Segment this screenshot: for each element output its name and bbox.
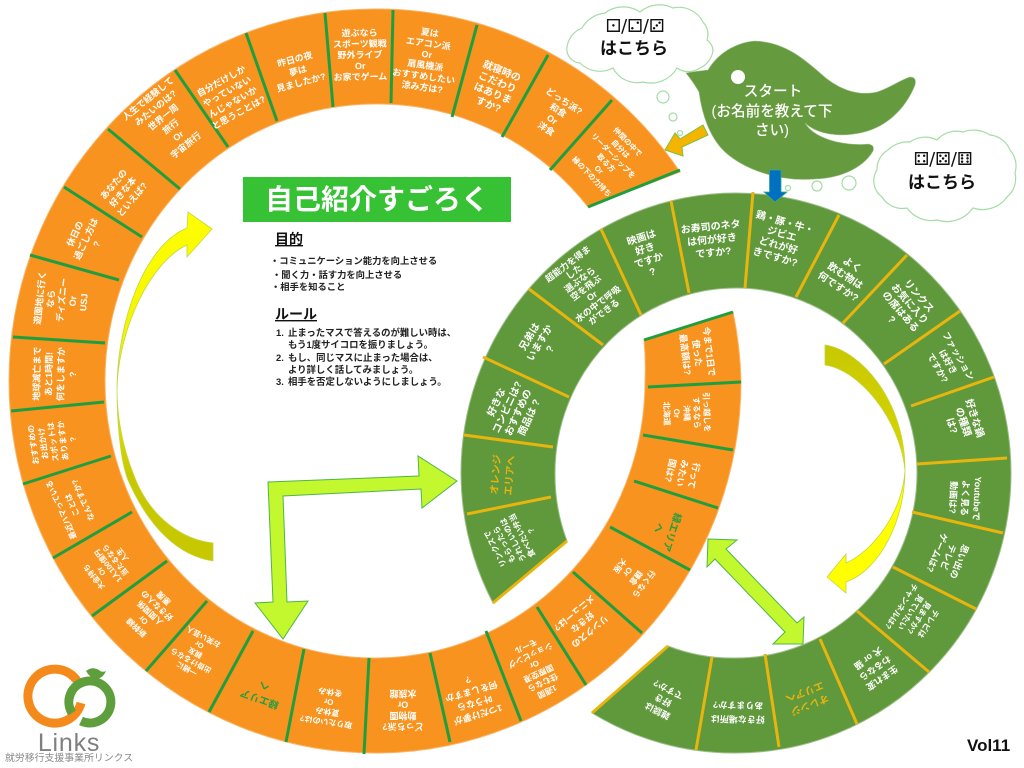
- cell: to orange area: オレンジ: [488, 454, 503, 495]
- text block: purpose list: [270, 255, 437, 292]
- cell: summer: エアコン派: [405, 36, 451, 52]
- cell: reborn: 生まれ変: [864, 663, 900, 693]
- cell: links menu: メニューは?: [552, 593, 597, 633]
- cell: kamakura or osaka: 鎌倉: [628, 569, 645, 588]
- cell: lottery: 人生: [113, 546, 130, 564]
- cell: favorite book: といえば?: [114, 180, 149, 219]
- cell: drink: 何ですか?: [816, 268, 861, 304]
- cell: highest spend: 最高額は?: [678, 333, 694, 376]
- cell: moving: するなら: [692, 397, 702, 429]
- cell: kamakura or osaka: 行くなら: [631, 569, 658, 600]
- cell: siblings: いますか: [524, 323, 555, 363]
- cell: dream: 昨日の夜: [276, 49, 314, 69]
- cell: hot pot: は?: [944, 416, 960, 435]
- cell: washoku or yoshoku: 和食: [548, 100, 569, 119]
- cell: bento: ?: [526, 527, 536, 535]
- cell: play: お家でゲーム: [333, 71, 387, 82]
- cell: drink: 飲む物は: [825, 259, 866, 292]
- cell: recent hobby: 最近ハマっている: [43, 479, 78, 541]
- cell: convenience store: 好きな: [484, 386, 508, 418]
- cell: experience: 世界一周: [145, 101, 180, 133]
- cell: summer: 夏は: [420, 27, 439, 39]
- cell: memory game: テレビ: [938, 543, 959, 572]
- cell: go out with: 親友: [185, 645, 204, 661]
- cell: movies: 映画は: [625, 227, 657, 248]
- orange ring band: [9, 9, 741, 753]
- cell: washoku or yoshoku: Or: [545, 113, 560, 127]
- cell: to orange area 2: オレンジ: [789, 692, 831, 718]
- cell: siblings: 兄弟は: [516, 320, 542, 353]
- cell: end of world: 何をしますか: [55, 347, 66, 401]
- start bird: スタート: [744, 83, 802, 100]
- cell: outing spot: ありますか: [56, 420, 70, 461]
- cell: to orange area 2: エリアへ: [784, 679, 825, 705]
- cell: to green area 2: 緑エリア: [660, 511, 685, 554]
- cell: bento: もらったら: [490, 525, 517, 565]
- cell: leadership: Or: [593, 163, 606, 176]
- cell: one wish: 1つだけ夢が: [453, 703, 504, 727]
- cell: to green area 2: へ: [652, 521, 665, 534]
- heading: purpose: 目的: [275, 231, 303, 247]
- cell: movies: ?: [648, 266, 657, 278]
- cell: country: みたい: [674, 459, 690, 487]
- cell: to green area: へ: [258, 679, 271, 692]
- cell: one wish: ?: [464, 674, 472, 685]
- cell: links seat: リンクス: [901, 277, 937, 315]
- cell: country: 国は?: [663, 458, 678, 483]
- cell: moving: 北海道: [662, 402, 673, 426]
- cell: lunch: 悪魔: [154, 590, 173, 608]
- cell: chat: 好き: [652, 691, 673, 709]
- cell: zoo or aquarium: Or: [397, 700, 408, 710]
- cell: one week stay: ショッピング: [507, 641, 554, 671]
- cell: drink: よく: [841, 254, 864, 275]
- cell: fashion: は好き: [937, 347, 960, 376]
- arrow: blue start arrow: [764, 170, 787, 202]
- text block: purpose list: ・相手を知ること: [271, 281, 345, 292]
- arrow: orange start arrow: [665, 125, 708, 156]
- cell: meat: どれが好: [758, 233, 800, 257]
- text block: rules list: 止まったマスで答えるのが難しい時は、: [288, 327, 456, 338]
- text block: rules list: 3.: [276, 376, 284, 387]
- cell: dream: 夢は: [288, 63, 308, 78]
- cell: tv: チャンネルは?: [883, 582, 921, 631]
- cell: memory game: 思い出の: [948, 543, 971, 580]
- cell: fashion: ファッション: [941, 330, 976, 382]
- logo: Links: Links: [38, 729, 100, 757]
- cell: kamakura or osaka: 大阪: [612, 557, 629, 576]
- cell: summer: 扇風機派: [407, 57, 444, 73]
- cell: summer: 涼み方は?: [401, 78, 444, 95]
- cell: holiday: ?: [91, 239, 103, 249]
- cell: outing spot: お出かけ: [35, 427, 50, 460]
- cell: superpower: Or: [585, 289, 600, 303]
- green ring band: [461, 193, 1011, 753]
- cell: recent hobby: ことは: [63, 492, 81, 518]
- text block: rules list: もし、同じマスに止まった場合は、: [288, 352, 438, 363]
- text block: rules list: [276, 327, 456, 387]
- bubbles: left of bird: [657, 91, 682, 136]
- cell: vacation: 冬休み: [317, 686, 343, 699]
- cloud: dice 1-3: はこちら: [600, 39, 668, 58]
- arrow: right curved yellow: [825, 345, 905, 593]
- cell: siblings: ?: [544, 344, 557, 355]
- cloud: dice 1-3: ⚀/⚁/⚂: [605, 16, 665, 37]
- cell: only me: と思うことは?: [210, 94, 267, 132]
- cell: end of world: あと1時間!: [43, 352, 54, 396]
- cell: theme park: USJ: [78, 293, 90, 312]
- title banner: [243, 177, 511, 222]
- cell: experience: 旅行: [160, 116, 181, 136]
- cell: only me: 自分だけしか: [195, 63, 247, 99]
- text block: purpose list: ・コミュニケーション能力を向上させる: [270, 255, 437, 266]
- text block: rules list: 1.: [276, 327, 284, 338]
- cell: lunch: 新幹線: [124, 616, 148, 640]
- cell: play: Or: [355, 61, 366, 71]
- cell: tv: 見ていたい: [896, 593, 926, 632]
- cell: vacation: Or: [323, 697, 334, 707]
- orange ring dividers: [11, 10, 741, 754]
- arrow: double-headed light green: [707, 539, 804, 644]
- cell: sushi: ですか?: [695, 245, 732, 260]
- cell: washoku or yoshoku: どっち派?: [544, 85, 585, 117]
- cell: reborn: わるなら: [857, 654, 893, 682]
- cell: dream: 見ましたか?: [275, 71, 327, 94]
- cell: zoo or aquarium: 水族館: [389, 688, 417, 700]
- cloud: dice 1-3: [567, 5, 713, 83]
- cell: sushi: お寿司のネタ: [680, 216, 741, 236]
- cell: bento: うれしいのは: [498, 517, 528, 563]
- cell: to orange area: エリアへ: [502, 455, 517, 496]
- cell: memory game: ゲームは?: [925, 532, 950, 574]
- cell: theme park: なら: [45, 289, 57, 308]
- cell: one week stay: 1週間: [536, 683, 559, 701]
- cell: youtube: 動画は?: [947, 481, 960, 514]
- cell: highest spend: 使った: [690, 339, 705, 367]
- cell: outing spot: スポットは: [46, 422, 60, 462]
- text block: purpose list: ・聞く力・話す力を向上させる: [272, 269, 402, 280]
- cell: chat: 雑談は: [643, 700, 672, 722]
- cell: go out with: お笑い芸人: [184, 624, 222, 651]
- cell: play: スポーツ観戦: [333, 38, 387, 49]
- cell: end of world: ?: [68, 371, 78, 377]
- cell: favorite book: あなたの: [98, 167, 129, 201]
- cell: favorite place: 好きな場所は: [711, 714, 765, 725]
- cell: highest spend: 今まで1日で: [701, 326, 718, 377]
- cloud: dice 4-6: はこちら: [908, 173, 976, 192]
- cell: links menu: リンクスの: [569, 613, 610, 649]
- start bird: (お名前を教えて下: [712, 103, 832, 120]
- cell: sleep: 就寝時の: [481, 57, 523, 84]
- text block: rules list: より詳しく話してみましょう。: [288, 364, 418, 375]
- cell: play: 遊ぶなら: [342, 27, 378, 38]
- cell: bento: リンクスで: [481, 529, 508, 569]
- arrow: left curved yellow: [117, 212, 213, 561]
- cell: lottery: 大金持ち: [80, 562, 107, 592]
- cell: tv: 見ますか?: [905, 600, 933, 636]
- cell: kamakura or osaka: Or: [622, 566, 634, 578]
- cell: convenience store: おすすめの: [502, 387, 534, 438]
- panel: green spiral track: [461, 192, 1011, 753]
- cell: superpower: 空を飛ぶ: [568, 272, 603, 303]
- cell: theme park: ディズニー: [54, 277, 69, 323]
- cell: favorite place: ありますか?: [713, 700, 763, 710]
- bubbles: right of bird: [786, 176, 856, 191]
- cell: hot pot: 好きな鍋: [963, 397, 988, 439]
- cell: only me: やっていない: [201, 74, 253, 109]
- cell: favorite book: 好きな本: [107, 174, 138, 209]
- cell: superpower: 水の中で呼吸: [573, 283, 623, 324]
- cell: one wish: 叶うなら: [456, 693, 493, 713]
- title banner: 自己紹介すごろく: [265, 183, 489, 215]
- cell: outing spot: おすすめの: [26, 424, 40, 465]
- cell: leadership: 仲間の中で: [612, 124, 645, 159]
- cell: fashion: ですか?: [925, 351, 950, 385]
- cell: washoku or yoshoku: 洋食: [536, 119, 557, 138]
- cell: sushi: は何が好き: [686, 230, 737, 248]
- cell: links seat: ?: [885, 314, 898, 326]
- cell: sleep: はありま: [472, 80, 514, 106]
- cell: superpower: 選ぶなら: [562, 264, 597, 295]
- cloud: dice 4-6: ⚃/⚄/⚅: [913, 149, 973, 170]
- cell: movies: 好き: [633, 239, 656, 258]
- cell: theme park: 遊園地に行く: [31, 270, 48, 325]
- heading: rules: ルール: [275, 306, 317, 322]
- cell: summer: Or: [421, 49, 433, 60]
- cell: end of world: 地球滅亡まで: [31, 347, 42, 401]
- cell: leadership: リーダーシップを: [590, 130, 638, 180]
- cloud: dice 4-6: [874, 130, 1016, 222]
- cell: theme park: Or: [67, 295, 79, 307]
- cell: lottery: 当たるなら: [99, 543, 130, 579]
- cell: holiday: 休日の: [64, 219, 85, 248]
- cell: leadership: 縁の下の力持ち: [571, 154, 614, 198]
- cell: one week stay: Or: [528, 659, 541, 671]
- cell: superpower: した: [564, 263, 584, 281]
- cell: go out with: Or: [193, 639, 205, 651]
- cell: lottery: 1人100億円: [92, 548, 124, 585]
- cell: tv: テレビは: [916, 608, 942, 640]
- cell: sleep: こだわり: [477, 69, 518, 95]
- cell: lottery: Or: [95, 565, 107, 578]
- cell: convenience store: コンビニは?: [489, 379, 524, 435]
- cell: moving: Or: [672, 409, 682, 418]
- cell: moving: 沖縄: [682, 405, 693, 421]
- cell: only me: んじゃないか: [207, 85, 259, 120]
- cell: meat: きですか?: [751, 245, 799, 269]
- cell: experience: Or: [171, 128, 186, 143]
- text block: rules list: 2.: [276, 352, 284, 363]
- cell: holiday: 過ごし方は: [71, 216, 100, 262]
- cell: superpower: 超能力を得ま: [543, 243, 593, 284]
- green ring dividers: [464, 192, 1007, 750]
- cell: leadership: 自分は: [610, 137, 633, 160]
- cell: bento: 食べたい弁当: [506, 512, 537, 559]
- cell: hot pot: の種類: [953, 405, 975, 438]
- cell: links menu: 好きな: [568, 609, 596, 635]
- cell: to green area: 緑エリア: [238, 687, 280, 712]
- cell: go out with: 出掛けるなら: [168, 646, 213, 676]
- cell: play: 野外ライブ: [337, 49, 383, 60]
- cell: lunch: Or: [137, 614, 150, 627]
- start bird: [686, 41, 915, 179]
- cell: outing spot: ?: [68, 436, 78, 442]
- cell: convenience store: 商品は ?: [514, 397, 543, 438]
- cell: moving: 引っ越しを: [702, 392, 713, 432]
- cell: one week stay: モール: [513, 637, 539, 656]
- cell: one week stay: 住むなら: [527, 672, 560, 694]
- logo: Links: 就労移行支援事業所リンクス: [5, 751, 133, 764]
- text block: rules list: 相手を否定しないようにしましょう。: [288, 376, 447, 387]
- cell: leadership: 取る方: [595, 151, 619, 174]
- cell: recent hobby: なんですか?: [70, 478, 96, 522]
- cell: experience: みたいのは?: [133, 88, 178, 128]
- cell: vacation: 夏休み: [315, 706, 340, 719]
- cell: experience: 人生で経験して: [120, 74, 176, 122]
- cell: superpower: ができる: [586, 296, 621, 327]
- cell: zoo or aquarium: どっち派?: [382, 722, 424, 732]
- cell: reborn: 犬 or 猫: [852, 645, 885, 672]
- cell: youtube: よく見る: [959, 480, 971, 516]
- cell: links seat: お気に入り: [889, 280, 932, 327]
- cell: experience: 宇宙旅行: [168, 129, 203, 161]
- cell: lunch: 人間関係: [135, 599, 165, 628]
- cell: vacation: 取りたいのは?: [299, 714, 353, 731]
- cell: movies: ですか: [633, 250, 665, 271]
- cell: one week stay: 国際空港: [522, 663, 556, 685]
- cell: go out with: 一緒に: [174, 660, 199, 679]
- cell: one wish: 何をしますか: [444, 679, 499, 704]
- cell: meat: ジビエ: [766, 223, 798, 244]
- cell: country: 行って: [686, 462, 703, 490]
- cell: chat: ですか?: [652, 677, 685, 701]
- start bird: さい): [755, 122, 789, 139]
- logo: Links: [5, 668, 133, 764]
- cell: links seat: の席はある: [880, 288, 923, 334]
- cell: summer: おすすめしたい: [392, 67, 456, 86]
- cell: lunch: 好きな人の: [138, 589, 175, 623]
- cell: sleep: すか?: [474, 94, 503, 115]
- cell: zoo or aquarium: 動物園: [389, 710, 417, 722]
- panel: orange spiral track: [9, 9, 741, 754]
- text block: rules list: もう1度サイコロを振りましょう。: [288, 339, 433, 350]
- cell: meat: 鶏・豚・牛・: [755, 207, 816, 236]
- arrow: L-shaped light green: [255, 456, 457, 639]
- cell: youtube: Youtubeで: [971, 476, 983, 521]
- volume label: Vol11: [967, 736, 1010, 755]
